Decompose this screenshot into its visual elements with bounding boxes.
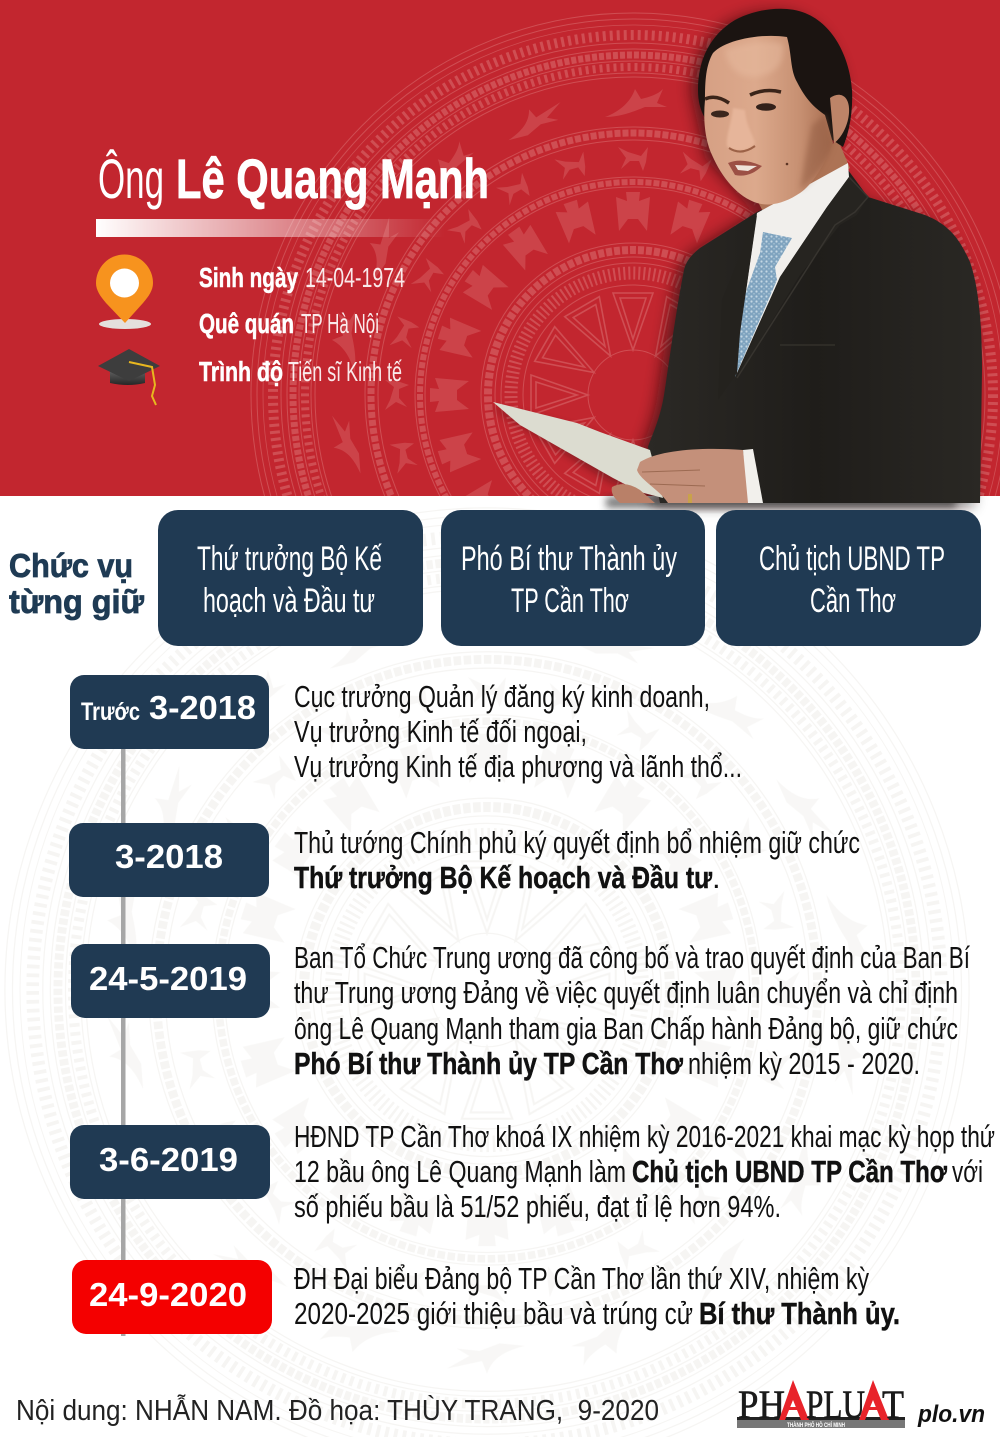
info: hometown: TP Hà Nội [301, 308, 379, 339]
text: 24-9-2020: 2020-2025 giới thiệu bầu và trúng cử [294, 1296, 693, 1331]
date badge: 3-6-2019: 3-6-2019 [99, 1141, 238, 1178]
position card: deputy minister: hoạch và Đầu tư [203, 582, 375, 620]
icon: graduation cap [98, 349, 160, 405]
text: 3-6-2019: với [952, 1154, 983, 1189]
position card: deputy minister: Thứ trưởng Bộ Kế [197, 540, 382, 578]
position card: deputy minister [158, 510, 423, 646]
text: before 3-2018: Cục trưởng Quản lý đăng ký kinh doanh, [294, 679, 710, 714]
title [98, 147, 489, 210]
timeline line [121, 749, 126, 1336]
text: 3-2018 [294, 825, 860, 895]
text: before 3-2018: Vụ trưởng Kinh tế đối ngoại, [294, 714, 587, 749]
logo text: plo.vn: plo.vn [917, 1401, 985, 1428]
watermark: bronze drum pattern [5, 508, 969, 1437]
title underline bar [96, 219, 446, 237]
credits: Nội dung: NHẪN NAM. Đồ họa: THÙY TRANG, 9-2020 [16, 1393, 659, 1427]
text: 24-5-2019: Phó Bí thư Thành ủy TP Cần Thơ [294, 1046, 684, 1081]
position card: deputy party secretary [441, 510, 705, 646]
icon: location pin [96, 254, 153, 329]
info: hometown: Quê quán [199, 308, 294, 339]
date badge: 24-5-2019 [71, 944, 270, 1018]
position card: deputy party secretary: Phó Bí thư Thành ủy [461, 540, 677, 578]
text: 24-5-2019: nhiệm kỳ 2015 - 2020. [688, 1046, 920, 1081]
date badge: before 3-2018: 3-2018 [149, 689, 256, 726]
text: 3-6-2019 [294, 1119, 995, 1224]
position card: deputy party secretary: TP Cần Thơ [511, 582, 629, 620]
title: Ông [98, 147, 164, 210]
logo: Pháp Luật: PLU [806, 1382, 865, 1427]
logo: Pháp Luật: THÀNH PHỐ HỒ CHÍ MINH [787, 1421, 845, 1429]
position card: city chairman: Cần Thơ [810, 582, 896, 620]
text: 24-9-2020: Bí thư Thành ủy. [699, 1296, 900, 1331]
text: 3-6-2019: 12 bầu ông Lê Quang Mạnh làm [294, 1154, 626, 1189]
portrait: man in dark suit holding paper [490, 9, 982, 508]
date badge: 24-9-2020 highlighted: 24-9-2020 [89, 1276, 247, 1313]
text: before 3-2018 [294, 679, 742, 784]
text: 3-2018: . [712, 860, 721, 895]
title: Lê Quang Mạnh [176, 147, 489, 210]
date badge: before 3-2018 [70, 675, 269, 749]
info: birth date: Sinh ngày [199, 262, 298, 293]
logo: Pháp Luật: T [882, 1382, 904, 1427]
info: birth date: 14-04-1974 [305, 262, 405, 293]
logo: Pháp Luật [737, 1380, 905, 1429]
logo: Pháp Luật: PH [738, 1382, 785, 1427]
date badge: before 3-2018: Trước [81, 698, 140, 726]
text: 24-5-2019 [294, 940, 970, 1081]
info: education: Tiến sĩ Kinh tế [288, 356, 402, 387]
header panel [0, 0, 1000, 496]
date badge: 24-5-2019: 24-5-2019 [89, 960, 247, 997]
date badge: 3-2018 [69, 823, 269, 897]
text: 3-6-2019: số phiếu bầu là 51/52 phiếu, đạt tỉ lệ hơn 94%. [294, 1189, 781, 1224]
info: birth date [199, 262, 405, 293]
heading: positions held [9, 547, 144, 620]
info: education [199, 356, 402, 387]
date badge: 24-9-2020 highlighted [72, 1260, 272, 1334]
heading: positions held: Chức vụ [9, 547, 133, 584]
text: before 3-2018: Vụ trưởng Kinh tế địa phương và lãnh thổ... [294, 749, 742, 784]
text: 24-9-2020 [294, 1261, 900, 1331]
date badge: 3-6-2019 [70, 1125, 270, 1199]
text: 3-2018: Thứ trưởng Bộ Kế hoạch và Đầu tư [294, 860, 712, 895]
heading: positions held: từng giữ [9, 583, 144, 620]
position card: city chairman [716, 510, 981, 646]
date badge: 3-2018: 3-2018 [115, 838, 223, 875]
info: education: Trình độ [199, 356, 283, 387]
